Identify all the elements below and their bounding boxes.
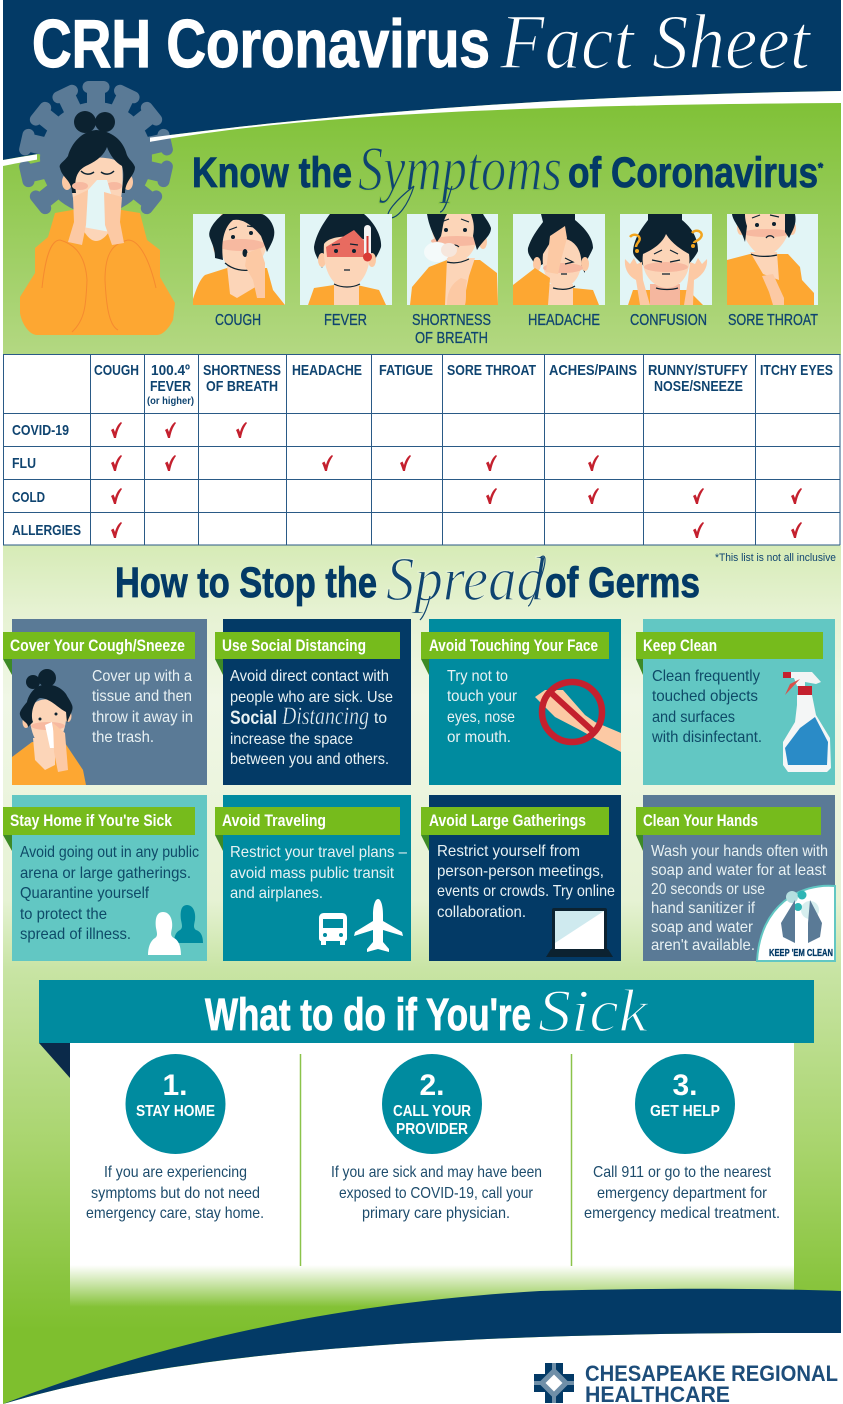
icon: laptop: [546, 908, 613, 957]
illustration: woman sneezing with coronavirus halo: [3, 81, 841, 335]
table header row: [94, 362, 833, 407]
heading: how to stop the spread: Spread: [386, 546, 546, 614]
card: stay home: [12, 795, 207, 961]
icon: woman with tissue: [12, 669, 86, 785]
footer white area: [3, 1333, 843, 1404]
card text: Quarantine yourself: [20, 885, 150, 902]
card text: and surfaces: [652, 709, 735, 726]
step 2: CALL YOUR: [393, 1103, 471, 1120]
symptom tile: fever: [300, 214, 392, 305]
card: clean your hands: [643, 795, 835, 961]
card: keep clean: [643, 619, 835, 785]
card text: with disinfectant.: [651, 729, 762, 746]
white panel: [70, 1043, 794, 1265]
card: avoid touching your face: [429, 619, 621, 785]
step 2: PROVIDER: [396, 1121, 468, 1138]
table row labels: COLD: [12, 489, 45, 506]
step 2: [331, 1054, 542, 1222]
card text: collaboration.: [437, 904, 526, 921]
card text: and airplanes.: [230, 885, 323, 902]
card text: Avoid direct contact with: [230, 668, 389, 685]
logo: Chesapeake Regional Healthcare: [534, 1361, 838, 1404]
table header row: FATIGUE: [379, 362, 433, 379]
card text: Avoid going out in any public: [20, 844, 199, 861]
card text: [230, 668, 393, 768]
card text: person-person meetings,: [437, 863, 604, 880]
card text: [447, 668, 518, 746]
card text: [230, 844, 407, 902]
banner: avoid traveling: [215, 807, 400, 851]
step 2: primary care physician.: [362, 1205, 510, 1222]
banner: large gatherings: Avoid Large Gatherings: [429, 811, 586, 830]
card text: people who are sick. Use: [230, 689, 393, 706]
white swoosh stripe: [3, 91, 841, 166]
heading: how to stop the spread: [115, 546, 700, 620]
banner: avoid touching: Avoid Touching Your Face: [429, 636, 598, 655]
table header row: FEVER: [150, 378, 191, 395]
table header row: 100.4º: [151, 362, 190, 379]
table header row: COUGH: [94, 362, 139, 379]
card text: the trash.: [92, 729, 154, 746]
title: [32, 0, 812, 85]
step 3: 3.: [672, 1069, 698, 1102]
woman hair and face: [74, 111, 96, 133]
step 2: 2.: [419, 1069, 445, 1102]
card text: avoid mass public transit: [230, 865, 395, 882]
symptom tile: confusion: [620, 214, 712, 305]
table row labels: ALLERGIES: [12, 522, 81, 539]
card text: eyes, nose: [447, 709, 515, 726]
card text: spread of illness.: [20, 926, 131, 943]
step 2: If you are sick and may have been: [331, 1164, 542, 1181]
card text: [651, 668, 762, 746]
heading: how to stop the spread: of Germs: [545, 559, 700, 607]
card: avoid traveling: [223, 795, 411, 961]
table header row: OF BREATH: [206, 378, 278, 395]
step 3: Call 911 or go to the nearest: [593, 1164, 771, 1181]
banner: clean hands: [636, 807, 821, 851]
table row labels: FLU: [12, 455, 36, 472]
card text: soap and water for at least: [651, 862, 827, 879]
card text: hand sanitizer if: [651, 900, 756, 917]
green label banners: [3, 632, 823, 851]
table header row: (or higher): [147, 396, 194, 407]
table header row: SHORTNESS: [203, 362, 281, 379]
symptom tile: cough: [193, 214, 285, 305]
symptom labels: CONFUSION: [630, 312, 707, 329]
banner: stay home: [3, 807, 195, 851]
card text: [20, 844, 199, 943]
card text: between you and others.: [230, 751, 389, 768]
symptom labels: OF BREATH: [415, 330, 488, 347]
table row labels: [12, 422, 81, 539]
heading: know the symptoms: Symptoms: [358, 133, 562, 204]
title: CRH Coronavirus: [32, 6, 490, 82]
table check marks: [111, 422, 802, 538]
heading: what to do: Sick: [538, 978, 650, 1044]
symptom tile: sore throat: [727, 214, 818, 305]
teal heading banner: [39, 980, 814, 1043]
step 1: STAY HOME: [136, 1103, 215, 1120]
symptom labels: SORE THROAT: [728, 312, 818, 329]
card text: throw it away in: [92, 709, 193, 726]
card text: increase the space: [230, 731, 353, 748]
icon: airplane: [354, 899, 403, 952]
card text: touched objects: [652, 688, 758, 705]
page background: pale green lower section: [3, 545, 841, 1404]
banner: avoid touching: [421, 632, 609, 675]
step 3: GET HELP: [650, 1103, 720, 1120]
card text: Try not to: [447, 668, 508, 685]
symptom tile: headache: [513, 214, 605, 305]
header band: [3, 0, 841, 166]
card text: Social: [230, 708, 277, 729]
symptom tile: shortness of breath: [407, 214, 498, 305]
icon: logo cross: [534, 1363, 574, 1403]
banner: keep clean: [636, 632, 823, 675]
icon: people: [148, 905, 203, 955]
card text: Clean frequently: [652, 668, 760, 685]
table header row: NOSE/SNEEZE: [654, 378, 743, 395]
card text: or mouth.: [447, 729, 511, 746]
card text: aren't available.: [651, 937, 755, 954]
card text: soap and water: [651, 919, 754, 936]
symptom labels: COUGH: [215, 312, 261, 329]
symptom labels: HEADACHE: [528, 312, 600, 329]
icon: keep em clean badge: [757, 886, 835, 961]
card text: Cover up with a: [92, 668, 192, 685]
step 3: [584, 1054, 780, 1222]
card text: Restrict your travel plans –: [230, 844, 407, 861]
card text: touch your: [447, 688, 518, 705]
card text: Distancing: [281, 703, 369, 730]
heading: know the symptoms: *: [818, 160, 824, 175]
card text: Restrict yourself from: [437, 843, 580, 860]
step 3: emergency medical treatment.: [584, 1205, 780, 1222]
step 1: If you are experiencing: [104, 1164, 247, 1181]
card text: tissue and then: [92, 688, 192, 705]
banner: social distancing: Use Social Distancing: [222, 636, 366, 655]
table: symptom comparison: [3, 354, 840, 545]
banner: clean hands: Clean Your Hands: [643, 811, 758, 830]
card text: Wash your hands often with: [651, 843, 828, 860]
icon: bus: [319, 913, 347, 945]
step 3: emergency department for: [597, 1185, 768, 1202]
card: cover your cough: [12, 619, 207, 785]
card text: 20 seconds or use: [651, 881, 765, 898]
table header row: RUNNY/STUFFY: [648, 362, 748, 379]
table header row: HEADACHE: [292, 362, 362, 379]
card: avoid large gatherings: [429, 795, 621, 961]
banner: keep clean: Keep Clean: [643, 636, 717, 655]
heading: know the symptoms: Know the: [192, 149, 352, 197]
card text: arena or large gatherings.: [20, 865, 191, 882]
icon: coronavirus: [18, 81, 174, 217]
footnote: *This list is not all inclusive: [715, 552, 836, 564]
step 1: symptoms but do not need: [91, 1185, 260, 1202]
banner: social distancing: [215, 632, 400, 675]
banner: avoid traveling: Avoid Traveling: [222, 811, 326, 830]
table header row: SORE THROAT: [447, 362, 536, 379]
page background: green upper section: [3, 85, 841, 355]
symptom labels: [215, 312, 818, 347]
table header row: ACHES/PAINS: [549, 362, 637, 379]
step 1: emergency care, stay home.: [86, 1205, 264, 1222]
banner: cover your cough: [3, 632, 195, 675]
step 1: 1.: [162, 1069, 188, 1102]
icon: spray bottle: [783, 672, 831, 772]
card text: [437, 843, 615, 921]
card text: to protect the: [20, 906, 107, 923]
tissue and hands: [82, 180, 112, 232]
heading: how to stop the spread: How to Stop the: [115, 559, 377, 607]
step 2: exposed to COVID-19, call your: [339, 1185, 534, 1202]
banner: large gatherings: [421, 807, 609, 851]
heading: what to do: What to do if You're: [205, 989, 531, 1040]
table row labels: COVID-19: [12, 422, 69, 439]
symptom labels: FEVER: [324, 312, 367, 329]
card text: events or crowds. Try online: [437, 883, 615, 900]
footer navy swoosh: [3, 1289, 841, 1404]
card: use social distancing: [223, 619, 411, 785]
icon: no touching hand: [535, 682, 621, 752]
card text: [92, 668, 193, 746]
banner: stay home: Stay Home if You're Sick: [10, 811, 172, 830]
title: Fact Sheet: [499, 0, 812, 85]
banner: cover your cough: Cover Your Cough/Sneeze: [10, 636, 185, 655]
woman body: [20, 210, 175, 335]
card text: to: [374, 710, 387, 727]
card text: [651, 843, 828, 954]
step 1: [86, 1054, 264, 1222]
symptom labels: SHORTNESS: [412, 312, 491, 329]
heading: know the symptoms: [192, 133, 824, 218]
panel: what to do if sick: [39, 978, 814, 1307]
